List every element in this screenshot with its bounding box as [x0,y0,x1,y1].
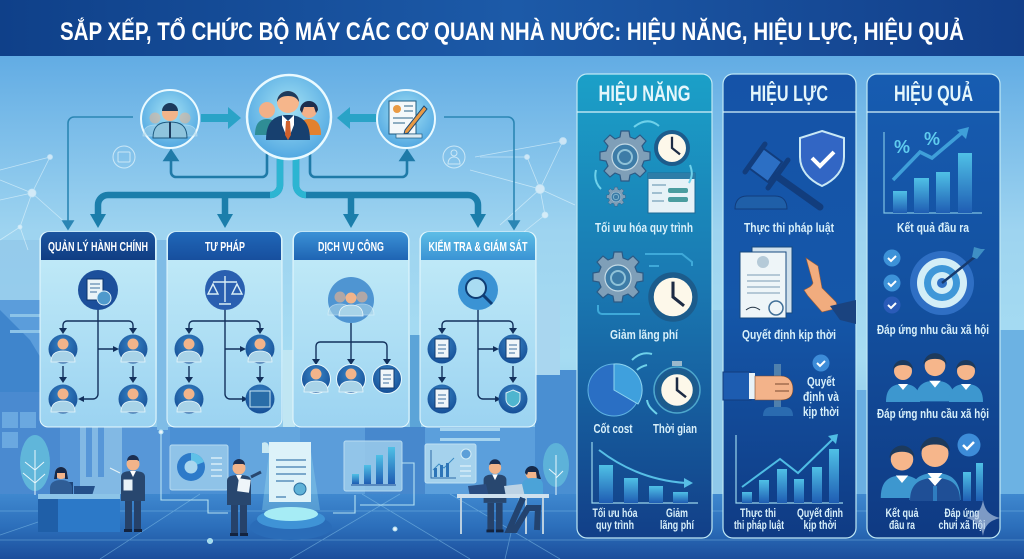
icon: pie and stopwatch [588,353,700,416]
panel: tư pháp [167,232,282,427]
top node: staff [141,90,199,148]
chart labels: Thực thi [740,508,776,520]
chart labels [734,508,843,532]
scene: line chart card [425,444,476,483]
caption: Tối ưu hóa quy trình [595,221,693,235]
chart labels: thi pháp luật [734,520,784,532]
caption: Quyết định kịp thời [742,328,836,342]
caption: Kết quả đầu ra [897,221,970,235]
bar chart [736,434,843,503]
chart labels: kịp thời [804,520,836,532]
chart labels [592,508,695,532]
bar chart [592,442,698,503]
chart labels: Quyết định [797,508,843,520]
heading: QUẢN LÝ HÀNH CHÍNH [48,239,148,254]
panel: dịch vụ công [293,232,409,427]
heading: HIỆU NĂNG [598,81,690,106]
chart labels: đầu ra [889,520,915,532]
chart labels: Giảm [666,508,688,520]
scene: left desk with two officials [20,435,145,532]
column: hiệu năng [577,74,712,538]
icon: gear and clock [593,252,695,319]
org tree [302,277,402,394]
panel: quản lý hành chính [40,232,156,427]
icon: tree [543,443,569,495]
bar chart: growth: % [894,137,910,157]
caption: Đáp ứng nhu cầu xã hội [877,407,989,421]
bar chart: growth: % [924,129,940,149]
caption: Quyết [807,375,836,389]
title banner [0,0,1024,56]
heading: HIỆU LỰC [750,81,828,106]
connector: thin outer lines [63,117,519,229]
floor [0,494,1024,559]
arrows: sub nodes to centre [201,107,376,129]
chart labels: chưi xã hội [938,520,986,532]
network lines decoration [0,138,575,250]
org tree [174,270,274,414]
city skyline [0,240,1024,500]
icon: smiling people and bubble [881,434,983,501]
caption: kịp thời [803,405,839,419]
heading: TƯ PHÁP [205,239,245,254]
icon: gear, clock, workflow [595,121,695,213]
heading: DỊCH VỤ CÔNG [318,239,384,254]
column: hiệu lực [723,74,856,538]
chart labels: Kết quả [886,508,919,520]
caption: Thời gian [653,422,697,436]
caption: Giảm lãng phí [610,328,678,342]
chart labels: Tối ưu hóa [592,508,638,520]
faint icon circles [113,146,465,168]
chart labels [886,508,986,532]
scene: right desk with two officials [457,443,569,534]
icon: hand on lever [723,354,830,416]
icon: three citizens [886,353,983,402]
scene: presenter and certificate pedestal [227,442,332,540]
bar chart: growth [884,127,982,213]
scene: connector lines [159,430,414,544]
top node: document and pen [377,90,435,148]
chart labels: quy trình [596,520,634,532]
icon: tree [20,435,50,495]
icon: target and checks [884,247,985,315]
org tree [428,270,528,414]
icon: sparkle watermark [966,500,1000,536]
icon: gavel and shield [735,131,844,209]
heading: KIỂM TRA & GIÁM SÁT [428,239,528,254]
top node: central leadership [247,75,331,159]
arrows: centre to four departments [98,158,478,217]
column: hiệu quả [867,74,1000,538]
scene: bar chart card [344,441,402,491]
caption [803,375,839,419]
caption: định và [803,390,839,404]
caption: Cốt cost [594,422,633,436]
icon: decree and hand [740,247,856,324]
panel: kiểm tra và giám sát [420,232,536,427]
scene: donut chart card [170,445,228,490]
org tree [48,270,148,414]
caption: Đáp ứng nhu cầu xã hội [877,323,989,337]
chart labels: lãng phí [660,520,695,532]
caption: Thực thi pháp luật [744,221,835,235]
chart labels: Đáp ứng [944,508,980,520]
arrows: centre to sub nodes [165,151,413,177]
heading: HIỆU QUẢ [894,81,973,106]
